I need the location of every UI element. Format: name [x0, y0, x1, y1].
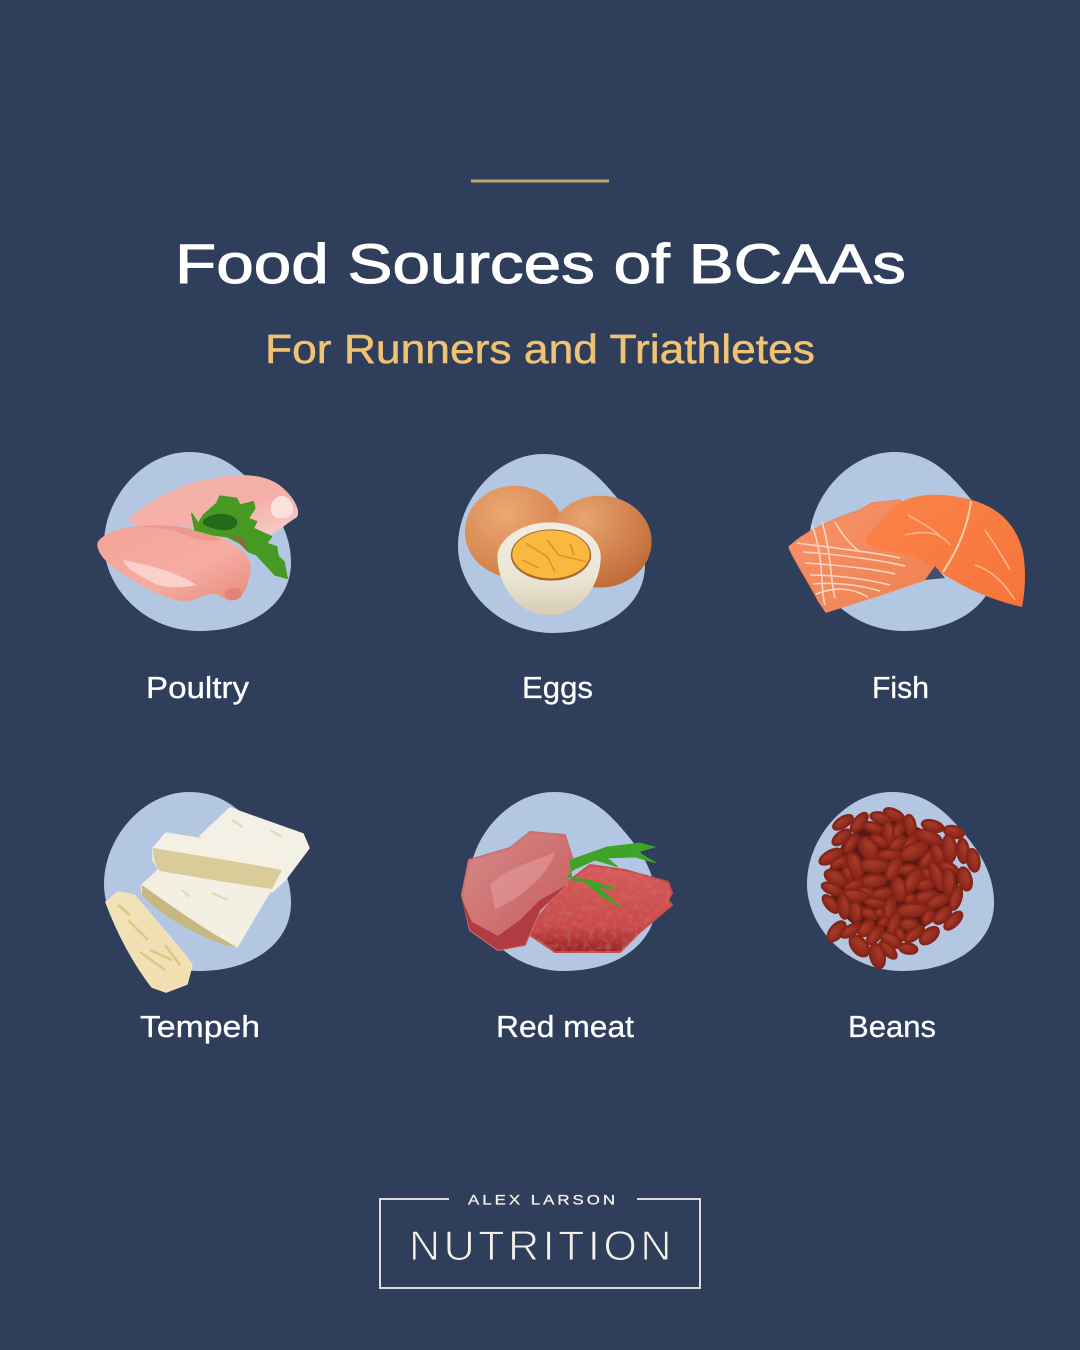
- label: Tempeh: Tempeh: [140, 1009, 260, 1044]
- panel: eggs: [458, 454, 652, 705]
- label: Beans: Beans: [848, 1009, 936, 1044]
- panel: red meat: [462, 792, 672, 1044]
- icon: raw steaks: [462, 832, 672, 952]
- label: Eggs: Eggs: [522, 670, 593, 705]
- logo: Alex Larson Nutrition: [380, 1192, 700, 1288]
- title: Food Sources of BCAAs: [175, 232, 906, 295]
- gold accent rule: [471, 180, 609, 182]
- subtitle: For Runners and Triathletes: [265, 326, 815, 372]
- panel: poultry: [97, 452, 298, 705]
- blob background: [104, 452, 291, 631]
- blob background: [809, 452, 996, 631]
- parsley: [192, 496, 287, 578]
- icon: salmon fillets: [789, 495, 1025, 612]
- panel: tempeh: [104, 792, 309, 1044]
- blob background: [104, 792, 291, 971]
- label: Fish: Fish: [872, 670, 929, 705]
- blob background: [807, 792, 994, 971]
- logo frame: [380, 1199, 700, 1288]
- icon: chicken breasts: [97, 475, 298, 601]
- panel: beans: [807, 792, 994, 1044]
- label: Poultry: Poultry: [146, 670, 250, 705]
- rosemary sprig: [567, 843, 656, 908]
- label: Red meat: Red meat: [496, 1009, 634, 1044]
- icon: eggs: [465, 486, 652, 615]
- logo text: Alex Larson: ALEX LARSON: [468, 1192, 618, 1208]
- icon: tempeh slices: [106, 808, 309, 992]
- panel: fish: [789, 452, 1025, 705]
- blob background: [469, 792, 656, 971]
- blob background: [458, 454, 645, 633]
- icon: kidney beans: [817, 806, 981, 970]
- logo text: Nutrition: NUTRITION: [409, 1222, 675, 1269]
